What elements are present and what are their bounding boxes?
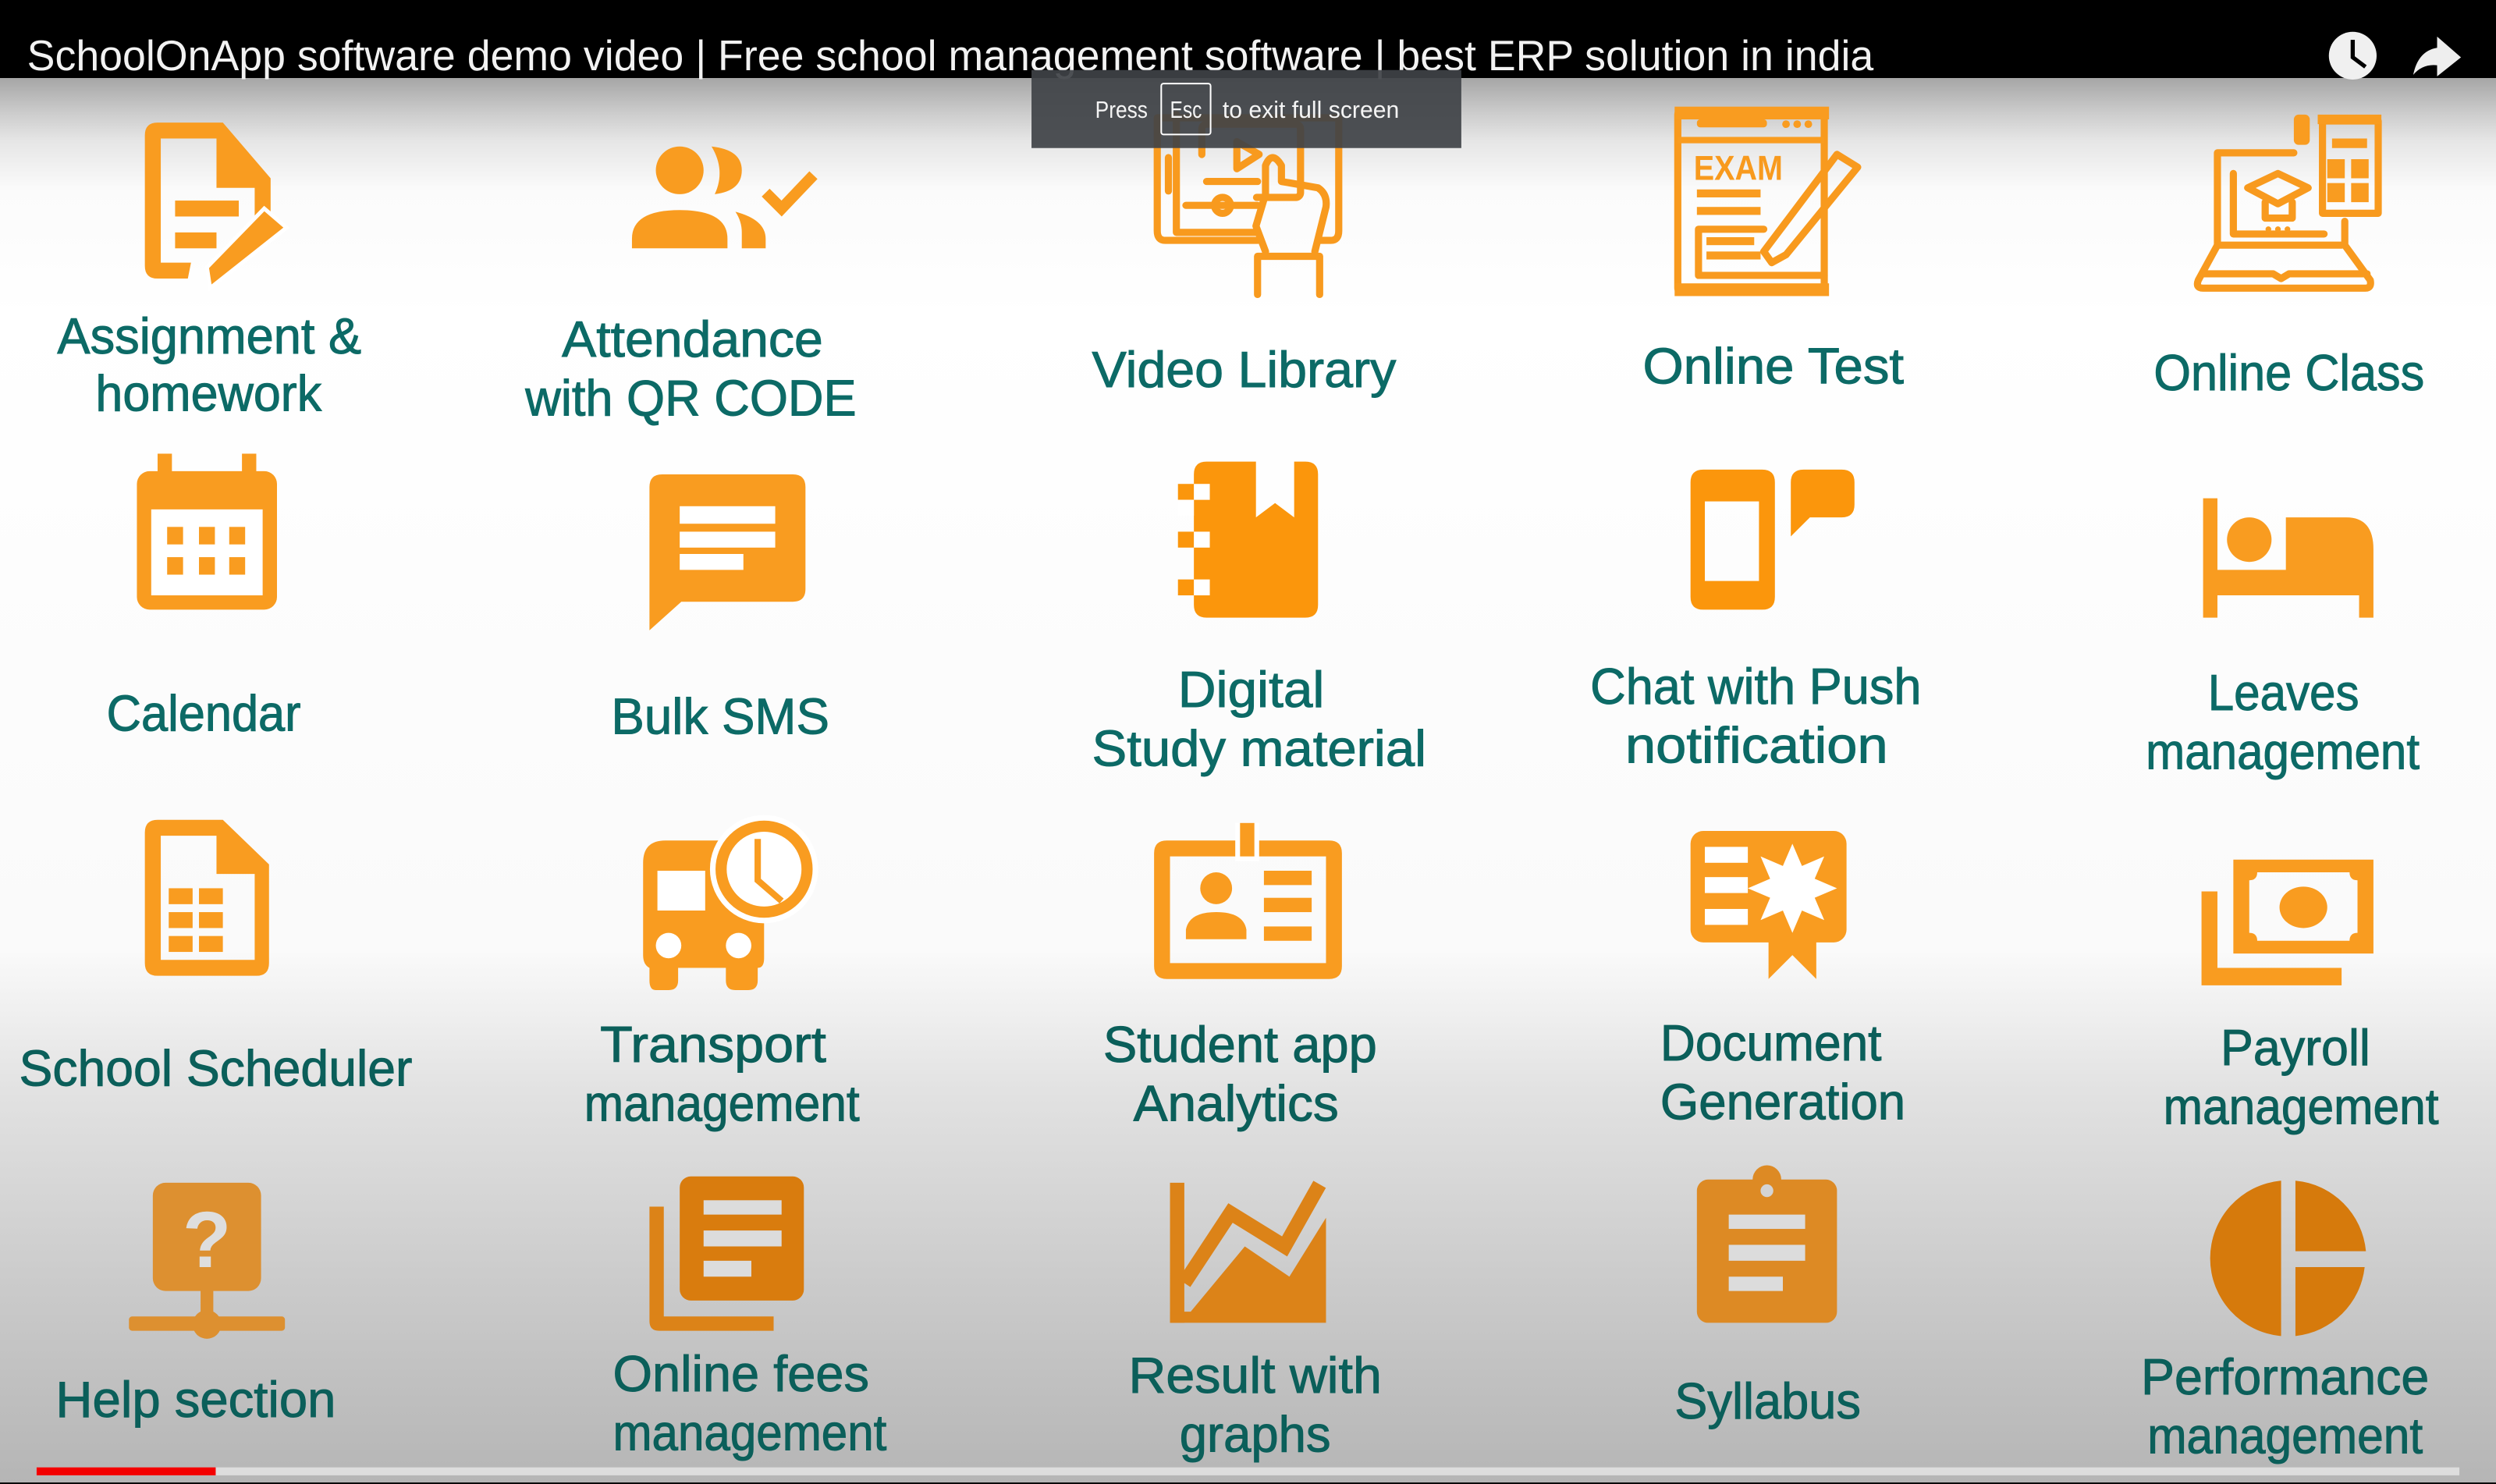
panel: payroll management (2164, 860, 2439, 1134)
icon: message bubble (649, 474, 805, 630)
icon: document stack (649, 1177, 804, 1331)
label: Help section (55, 1371, 336, 1428)
label (584, 1016, 860, 1131)
panel: calendar (107, 453, 301, 741)
label: Video Library (1092, 341, 1397, 398)
top bar: SchoolOnApp software demo video | Free school management software | best ERP solution in india (27, 31, 1874, 80)
icon: tablet with hand (1157, 115, 1339, 294)
label (2164, 1019, 2439, 1134)
esc notice overlay: Esc (1170, 97, 1202, 123)
label: Calendar (107, 684, 301, 741)
label: management (612, 1404, 886, 1461)
panel: assignment and homework (57, 122, 361, 421)
esc notice overlay: to exit full screen (1223, 97, 1399, 123)
panel: transport management (584, 815, 860, 1131)
label (57, 307, 361, 421)
icon: spreadsheet file (145, 820, 269, 976)
label: management (2164, 1077, 2439, 1134)
icon: id card (1154, 823, 1342, 979)
label: Assignment & (57, 307, 361, 364)
label (1660, 1014, 1905, 1130)
icon: question mark network: ? (183, 1195, 231, 1284)
label: Online fees (612, 1345, 869, 1402)
panel: online fees management (612, 1177, 886, 1461)
icon: people and check (632, 147, 814, 248)
label (1590, 658, 1921, 773)
label (1128, 1347, 1382, 1463)
label: School Scheduler (19, 1039, 412, 1096)
icon: banknotes (2202, 860, 2374, 985)
label (2146, 664, 2420, 779)
icon: calendar (137, 453, 277, 609)
panel: online class (2153, 115, 2424, 401)
label (1103, 1016, 1377, 1131)
icon: certificate with ribbon (1691, 831, 1847, 979)
label: Online Class (2153, 344, 2424, 401)
panel: digital study material (1092, 462, 1426, 776)
icon: document with pencil (145, 122, 286, 288)
icon: line chart (1170, 1183, 1326, 1322)
label: Attendance (562, 311, 823, 367)
panel: document generation (1660, 831, 1905, 1130)
panel: school scheduler (19, 820, 412, 1096)
label (2141, 1348, 2429, 1464)
progress bar (37, 1468, 2459, 1475)
label: Result with (1128, 1347, 1382, 1404)
esc notice overlay: Press (1095, 97, 1148, 123)
panel: leaves management (2146, 499, 2420, 779)
top bar (0, 0, 2496, 80)
label: Online Test (1642, 338, 1904, 395)
label: Performance (2141, 1348, 2429, 1405)
label (612, 1345, 886, 1461)
label: Chat with Push (1590, 658, 1921, 715)
label: management (2146, 722, 2420, 779)
label: Transport (600, 1016, 826, 1073)
label: Digital (1178, 661, 1324, 718)
icon: bus with clock (643, 815, 818, 990)
icon: exam sheet with pencil: EXAM (1694, 148, 1783, 188)
label: Generation (1660, 1073, 1905, 1130)
panel: help section (55, 1183, 336, 1428)
icon: exam sheet with pencil (1674, 107, 1858, 296)
label (524, 311, 857, 426)
label (1092, 661, 1426, 776)
label: management (2147, 1408, 2423, 1464)
icon: bed (2203, 499, 2374, 618)
panel: syllabus (1674, 1165, 1861, 1429)
panel: performance management (2141, 1180, 2429, 1464)
panel: attendance (524, 147, 857, 426)
panel: chat with push notification (1590, 470, 1921, 773)
panel: bulk sms (611, 474, 829, 745)
icon: phone and bubble (1691, 470, 1855, 609)
label: management (584, 1074, 860, 1131)
icon: laptop with calculator (2197, 115, 2381, 288)
label: Document (1660, 1014, 1881, 1071)
bottom edge (0, 1482, 2496, 1484)
label: Syllabus (1674, 1372, 1861, 1429)
panel: video library (1092, 115, 1397, 398)
icon: pie chart (2210, 1180, 2366, 1336)
icon: notebook with bookmark (1178, 462, 1318, 618)
panel: student app analytics (1103, 823, 1377, 1131)
icon: question mark network (129, 1183, 285, 1339)
label: with QR CODE (524, 369, 857, 426)
label: Analytics (1134, 1074, 1339, 1131)
label: homework (95, 364, 321, 421)
panel: result with graphs (1128, 1183, 1382, 1463)
label: graphs (1180, 1406, 1331, 1463)
label: notification (1625, 716, 1888, 773)
label: Payroll (2221, 1019, 2370, 1076)
panel: online test (1642, 107, 1904, 395)
esc notice overlay (1031, 70, 1461, 148)
label: Leaves (2208, 664, 2359, 721)
label: Bulk SMS (611, 688, 829, 745)
label: Student app (1103, 1016, 1377, 1073)
icon: clipboard (1697, 1165, 1837, 1322)
label: Study material (1092, 719, 1426, 776)
